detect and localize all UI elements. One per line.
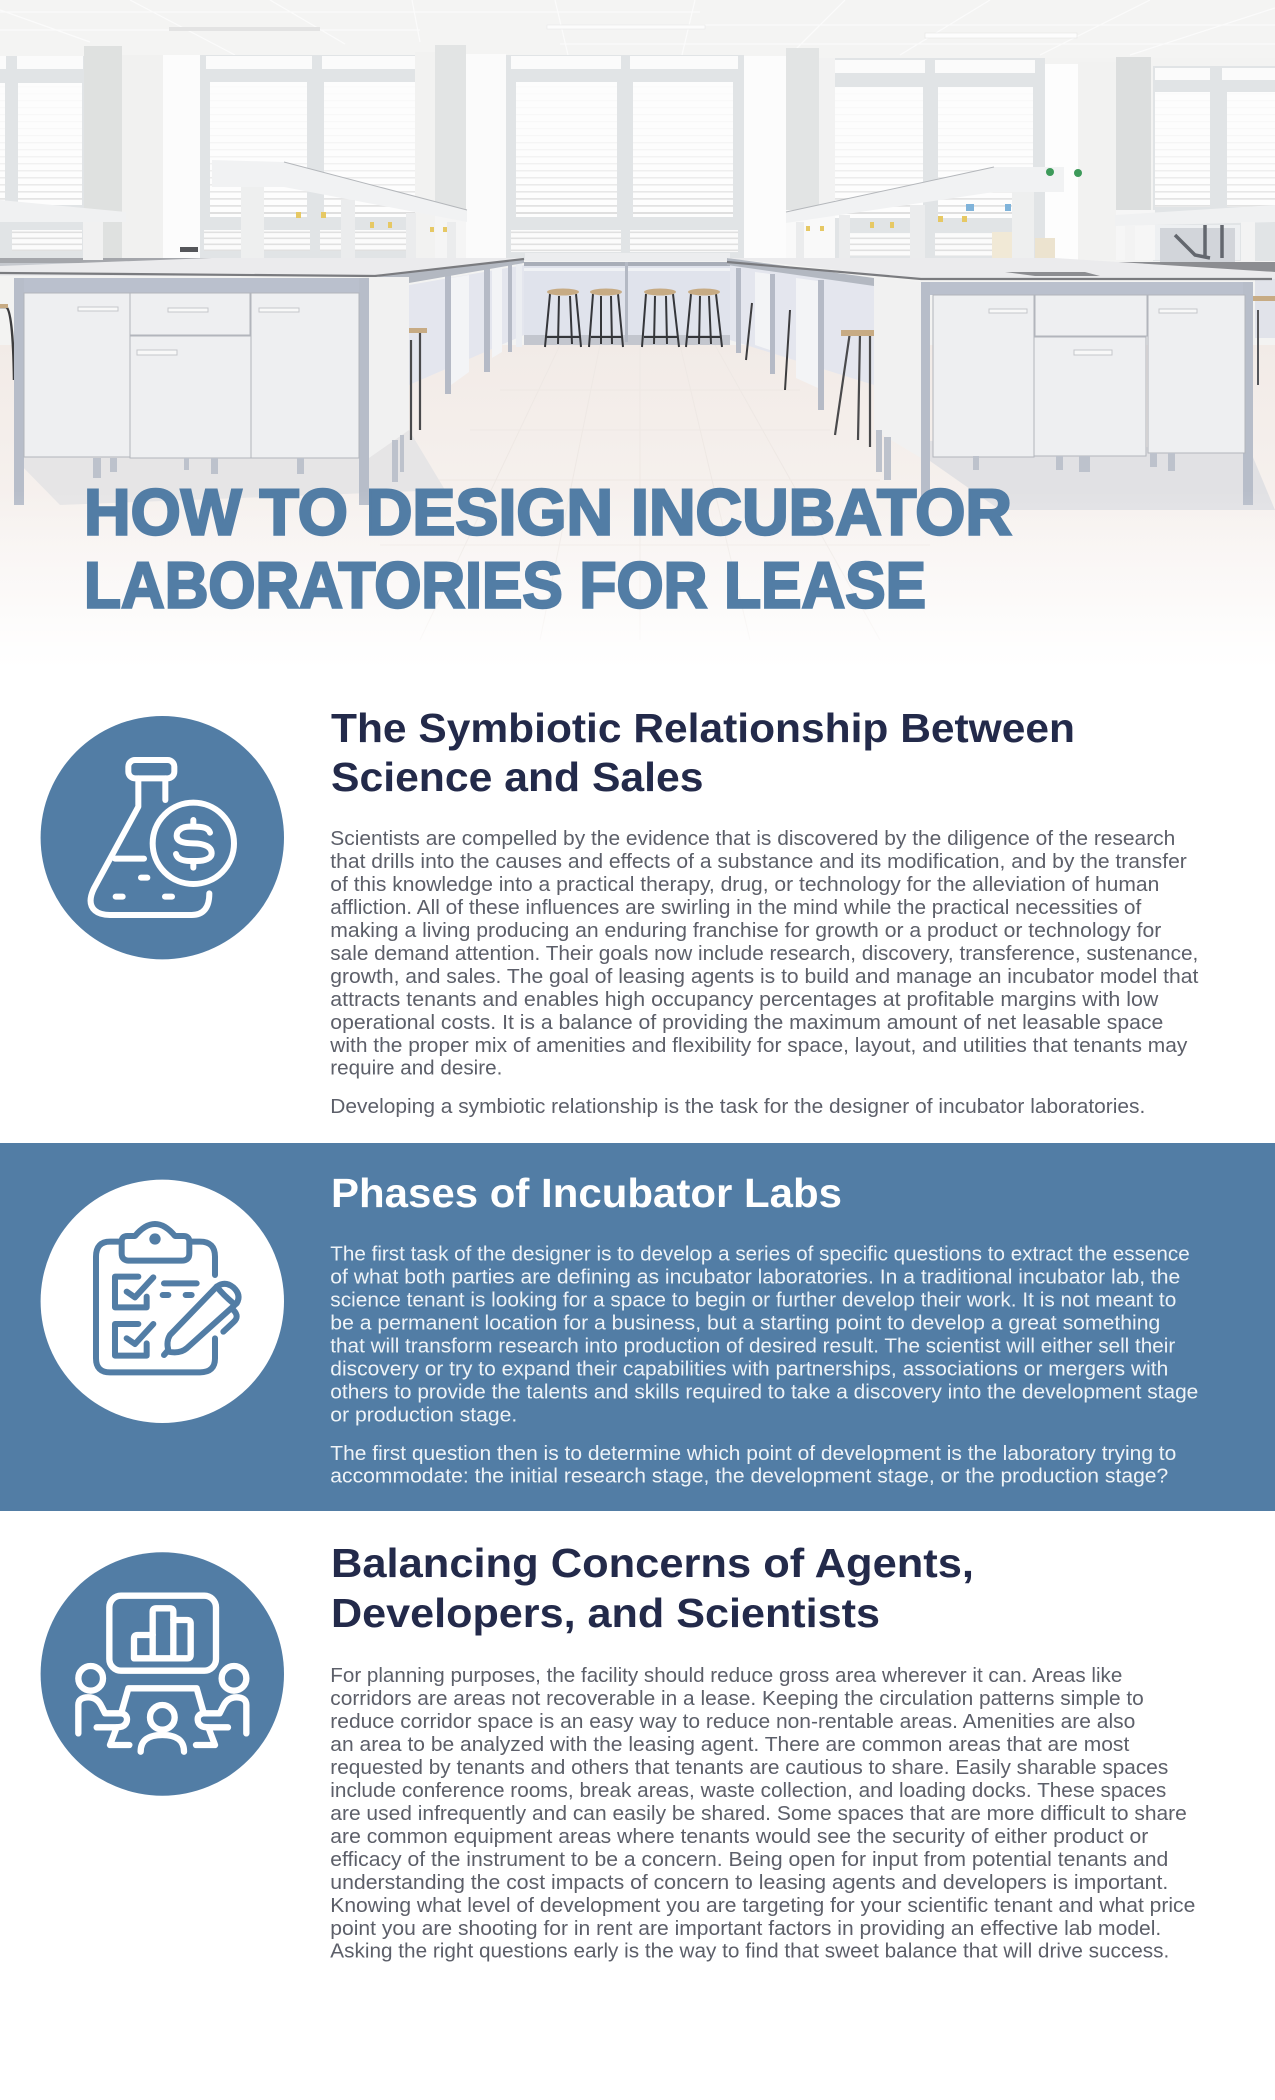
text block: point you are shooting for in rent are important factors in providing an effective lab model. bbox=[330, 1917, 1161, 1940]
text block: discovery or try to expand their capabilities with partnerships, associations or mergers with bbox=[330, 1358, 1168, 1381]
countertop bbox=[727, 258, 1275, 279]
text block: include conference rooms, break areas, waste collection, and loading docks. These spaces bbox=[330, 1779, 1166, 1802]
text block: science tenant is looking for a space to begin or further develop their work. It is not meant to bbox=[330, 1289, 1176, 1312]
text block: require and desire. bbox=[330, 1056, 502, 1080]
title: HOW TO DESIGN INCUBATOR bbox=[84, 476, 1012, 548]
right side run under counter bbox=[727, 258, 874, 410]
countertop bbox=[0, 258, 524, 276]
text block: The first question then is to determine which point of development is the laboratory trying to bbox=[330, 1442, 1176, 1465]
left side run under counter bbox=[375, 259, 524, 394]
text block: that will transform research into production of desired result. The scientist will either sell their bbox=[330, 1335, 1175, 1358]
text block: understanding the cost impacts of concern to leasing agents and developers is important. bbox=[330, 1871, 1168, 1894]
icon: flask with dollar coin bbox=[41, 716, 284, 959]
panel: balancing concerns bbox=[41, 1540, 1195, 1962]
cabinet doors bbox=[933, 295, 1245, 457]
text block: or production stage. bbox=[330, 1404, 517, 1427]
title bbox=[84, 476, 1012, 622]
text block: with the proper mix of amenities and flexibility for space, layout, and utilities that tenants may bbox=[329, 1034, 1188, 1057]
panel: symbiotic relationship bbox=[41, 705, 1199, 1118]
far right bench with equipment bbox=[1055, 205, 1275, 385]
ceiling bbox=[0, 0, 1275, 58]
floor bbox=[0, 345, 1275, 670]
stool by right bench bbox=[835, 332, 870, 447]
windows bbox=[0, 55, 1275, 261]
back wall with stools bbox=[524, 262, 730, 347]
text block bbox=[330, 1243, 1198, 1488]
hero photo: laboratory interior bbox=[0, 0, 1275, 670]
cabinet feet bbox=[93, 435, 404, 482]
far left bench bbox=[0, 200, 240, 380]
text block: attracts tenants and enables high occupancy percentages at profitable margins with low bbox=[330, 988, 1158, 1011]
text block: Scientists are compelled by the evidence that is discovered by the diligence of the research bbox=[330, 827, 1175, 850]
text block: making a living producing an enduring franchise for growth or a product or technology for bbox=[330, 919, 1161, 942]
text block: Knowing what level of development you are targeting for your scientific tenant and what price bbox=[330, 1894, 1195, 1917]
icon: clipboard checklist with pencil bbox=[41, 1180, 284, 1423]
text block: reduce corridor space is an easy way to reduce non-rentable areas. Amenities are also bbox=[330, 1710, 1135, 1733]
text block: operational costs. It is a balance of providing the maximum amount of net leasable space bbox=[330, 1011, 1163, 1034]
heading bbox=[331, 705, 1075, 800]
cabinet frame bbox=[921, 282, 1253, 295]
service shelf left bbox=[180, 160, 467, 275]
text block: corridors are areas not recoverable in a lease. Keeping the circulation patterns simple to bbox=[330, 1687, 1144, 1710]
icon: meeting around chart screen bbox=[41, 1552, 284, 1796]
cabinet feet bbox=[876, 430, 1175, 480]
text block: of this knowledge into a practical therapy, drug, or technology for the alleviation of human bbox=[330, 873, 1159, 896]
text block: are common equipment areas where tenants would see the security of either product or bbox=[330, 1825, 1148, 1848]
white fade bbox=[0, 490, 1275, 670]
heading bbox=[331, 1540, 974, 1636]
text block: affliction. All of these influences are swirling in the mind while the practical necessities of bbox=[330, 896, 1142, 919]
text block bbox=[330, 1664, 1195, 1962]
text block: Asking the right questions early is the way to find that sweet balance that will drive success. bbox=[330, 1940, 1169, 1962]
heading: Phases of Incubator Labs bbox=[331, 1170, 842, 1216]
text block: For planning purposes, the facility should reduce gross area wherever it can. Areas like bbox=[330, 1664, 1122, 1687]
heading: Developers, and Scientists bbox=[331, 1590, 880, 1636]
text block: efficacy of the instrument to be a concern. Being open for input from potential tenants and bbox=[330, 1848, 1168, 1871]
text block: The first task of the designer is to develop a series of specific questions to extract the essence bbox=[330, 1243, 1190, 1266]
text block: others to provide the talents and skills required to take a discovery into the development stage bbox=[330, 1381, 1198, 1404]
side panel bbox=[874, 277, 921, 458]
text block: that drills into the causes and effects of a substance and its modification, and by the transfer bbox=[330, 850, 1187, 873]
panel: phases of incubator labs bbox=[0, 1143, 1275, 1511]
cabinet frame bbox=[14, 278, 369, 293]
text block: requested by tenants and others that tenants are cautious to share. Easily sharable spaces bbox=[330, 1756, 1168, 1779]
text block: Developing a symbiotic relationship is the task for the designer of incubator laboratories. bbox=[330, 1095, 1145, 1118]
heading: Science and Sales bbox=[331, 754, 704, 800]
text block bbox=[329, 827, 1199, 1118]
cabinet doors bbox=[24, 293, 359, 458]
right lab bench bbox=[727, 258, 1275, 505]
text block: growth, and sales. The goal of leasing agents is to build and manage an incubator model that bbox=[330, 965, 1199, 988]
columns and walls bbox=[84, 45, 1155, 261]
text block: an area to be analyzed with the leasing agent. There are common areas that are most bbox=[330, 1733, 1130, 1756]
text block: of what both parties are defining as incubator laboratories. In a traditional incubator lab, the bbox=[330, 1266, 1180, 1289]
text block: be a permanent location for a business, but a starting point to develop a great something bbox=[330, 1312, 1160, 1335]
stool by left bench bbox=[411, 330, 420, 440]
left lab bench bbox=[0, 258, 524, 505]
service shelf right bbox=[786, 167, 1082, 274]
text block: accommodate: the initial research stage, the development stage, or the production stage? bbox=[330, 1465, 1168, 1488]
title: LABORATORIES FOR LEASE bbox=[84, 548, 926, 622]
text block: sale demand attention. Their goals now include research, discovery, transference, sustenance, bbox=[330, 942, 1198, 965]
heading: Balancing Concerns of Agents, bbox=[331, 1540, 974, 1586]
heading: The Symbiotic Relationship Between bbox=[331, 705, 1075, 751]
text block: are used infrequently and can easily be shared. Some spaces that are more difficult to share bbox=[330, 1802, 1187, 1825]
side panel bbox=[369, 277, 409, 458]
